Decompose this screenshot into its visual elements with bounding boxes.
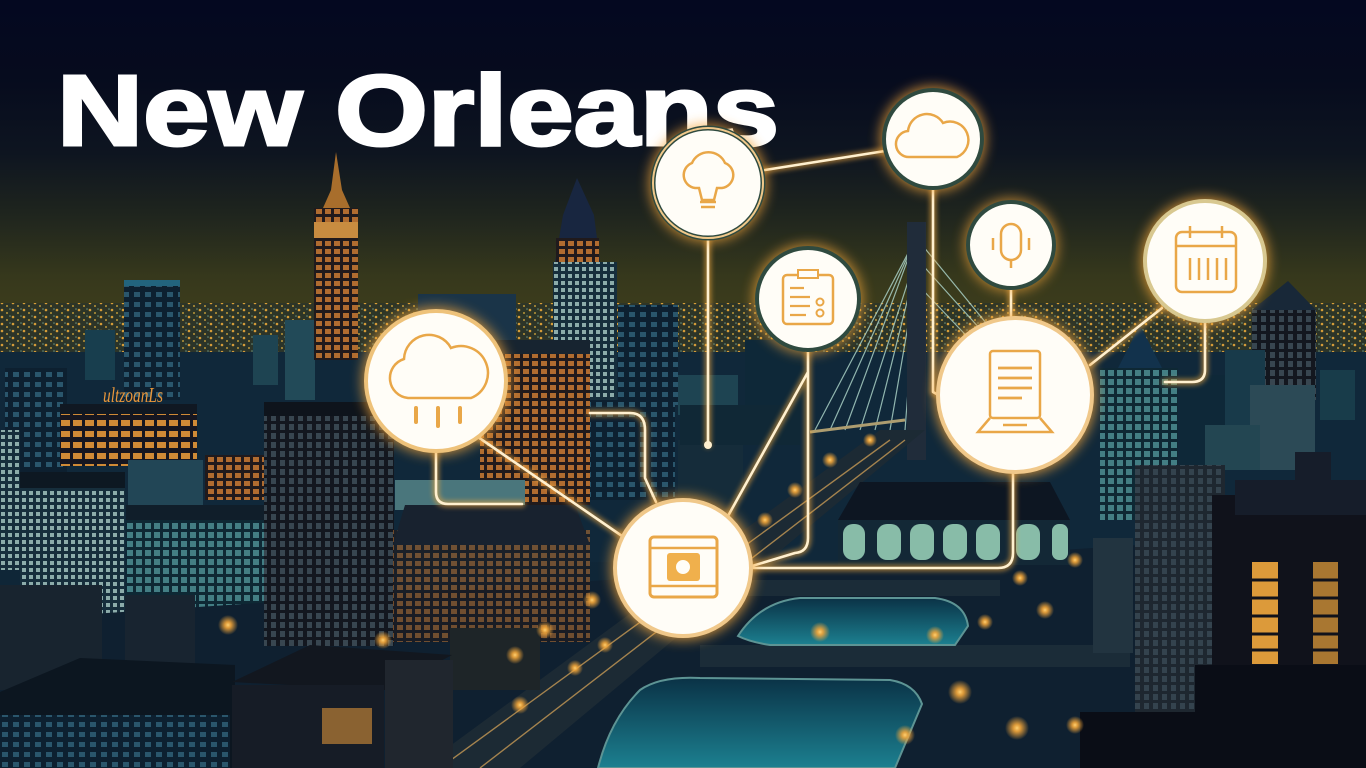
background skyline [0,152,1366,562]
node: calendar [1141,197,1269,325]
teal domed tower [1118,325,1162,368]
foreground buildings [0,402,1366,768]
neon rooftop sign: ultzoanLs [103,383,163,407]
right grey block [1135,465,1225,715]
node: chip panel [611,496,755,640]
roofed brick block [393,530,590,642]
orange window tower [60,404,197,466]
bridge tower [907,222,926,460]
gold art deco tower [314,152,358,360]
node: lightbulb cloud [649,124,767,242]
network connector lines [436,151,1205,568]
title: New Orleans [57,55,779,167]
node: clipboard [753,244,863,354]
street lamps [218,433,1084,745]
pale office block [20,472,125,622]
node: rain cloud [362,307,510,455]
node: cloud [880,86,986,192]
distant city lights band [0,303,1366,353]
lower left blocks [0,585,453,768]
suspension bridge [810,240,1000,432]
connector end dot [704,441,712,449]
station with arched windows [838,482,1070,565]
right dark block with amber windows [1080,452,1366,768]
blue tower [124,280,180,400]
midground buildings [0,325,1260,622]
dark central tower [264,402,394,646]
water pools [598,598,968,768]
ground and streets [0,430,1366,768]
right dark tower [1252,281,1316,400]
spire tower [553,178,617,404]
node: microphone [964,198,1058,292]
node: laptop document [934,314,1096,476]
